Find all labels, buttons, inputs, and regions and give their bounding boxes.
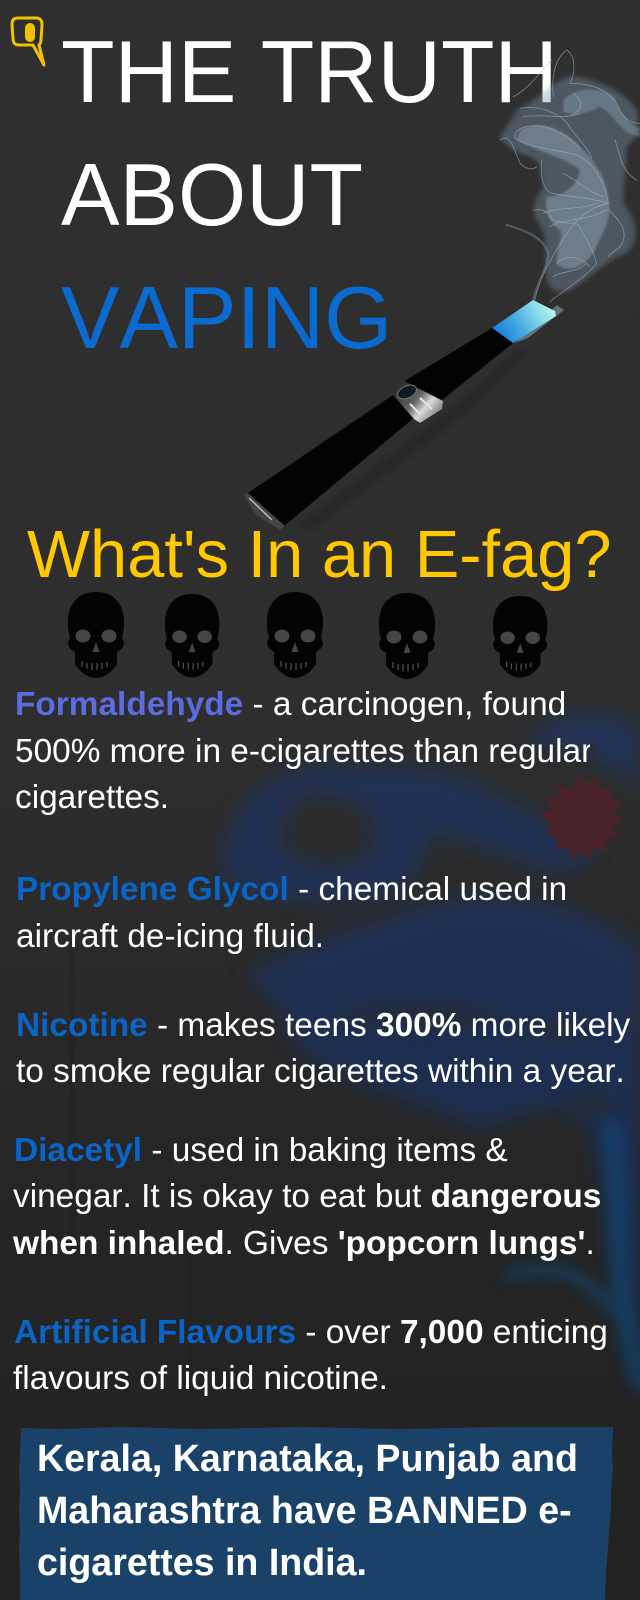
metal end cap (244, 493, 285, 530)
ingredient: formaldehyde (15, 686, 592, 816)
callout text: Maharashtra have BANNED e- (37, 1489, 572, 1531)
ingredient: propylene glycol: aircraft de-icing fluid. (16, 918, 324, 955)
illustration: e-cigarette (244, 300, 564, 530)
silver collar (392, 381, 443, 423)
ingredient: formaldehyde: cigarettes. (15, 779, 169, 816)
skull 2 (165, 594, 219, 677)
callout text: cigarettes in India. (37, 1541, 367, 1583)
red starburst stamp (541, 773, 623, 860)
lower barrel (245, 395, 415, 527)
title: the truth about vaping (61, 23, 558, 367)
ingredient: nicotine: Nicotine - makes teens 300% more likely (16, 1007, 631, 1044)
ingredient: formaldehyde: Formaldehyde - a carcinogen, found (15, 686, 566, 723)
vapour chamber (515, 305, 564, 343)
ingredient: diacetyl: Diacetyl - used in baking items & (14, 1132, 508, 1169)
skull 4 (379, 593, 435, 679)
ingredient: nicotine (16, 1007, 631, 1090)
title: the truth about vaping: THE TRUTH (61, 23, 558, 121)
ingredient: propylene glycol (16, 871, 567, 955)
callout text (37, 1437, 578, 1583)
ingredient: propylene glycol: Propylene Glycol - chemical used in (16, 871, 567, 908)
ingredient: artificial flavours: flavours of liquid nicotine. (13, 1360, 388, 1397)
skull 1 (68, 592, 124, 678)
ingredient: nicotine: to smoke regular cigarettes within a year. (16, 1053, 625, 1090)
callout background (19, 1427, 613, 1600)
row of skulls (68, 592, 547, 679)
skull 5 (493, 596, 547, 678)
ingredient: artificial flavours: Artificial Flavours - over 7,000 enticing (14, 1314, 608, 1351)
ingredient: diacetyl: when inhaled. Gives 'popcorn lungs'. (12, 1225, 595, 1262)
smoke wisps (500, 50, 640, 302)
blue smoke backdrop (224, 714, 640, 1400)
upper barrel (403, 328, 513, 400)
ingredient: formaldehyde: 500% more in e-cigarettes than regular (15, 733, 592, 770)
ingredient: artificial flavours (13, 1314, 608, 1397)
smoke soft mass (500, 76, 638, 292)
heading: what's in an e-fag: What's In an E-fag? (27, 518, 612, 592)
pen shadow (300, 350, 530, 530)
callout text: Kerala, Karnataka, Punjab and (37, 1437, 578, 1479)
ingredient: diacetyl: vinegar. It is okay to eat but dangerous (13, 1178, 601, 1215)
skull 3 (267, 592, 323, 678)
callout: state bans (19, 1427, 613, 1600)
illustration: smoke rising from the vape (500, 50, 640, 302)
title: the truth about vaping: ABOUT (61, 146, 363, 244)
ingredient: diacetyl (12, 1132, 601, 1262)
title: the truth about vaping: VAPING (61, 269, 392, 367)
logo: quint speech bubble (12, 18, 44, 65)
